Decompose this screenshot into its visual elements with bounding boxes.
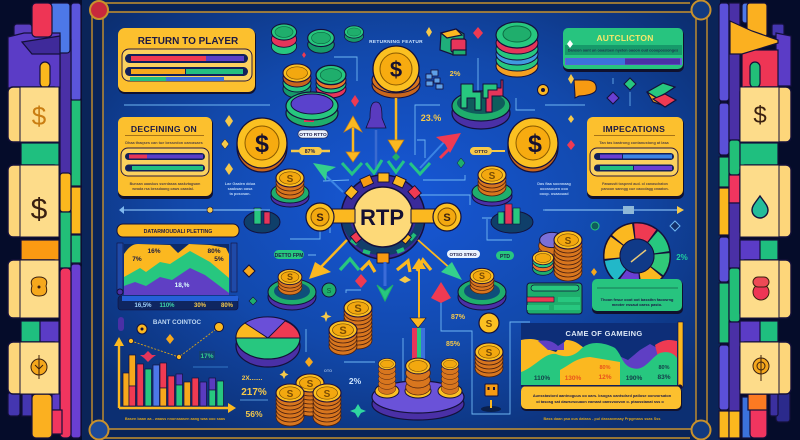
heading: implications: IMPECATIONS bbox=[603, 124, 665, 134]
label: rtp: RTP bbox=[360, 205, 404, 230]
chart values: 110% bbox=[534, 375, 550, 382]
percent labels: OTO bbox=[324, 369, 332, 373]
panel: implications: Fawasstt tospeed aud. ol canaschaton bbox=[602, 182, 668, 186]
panel: implications bbox=[587, 117, 684, 199]
chart values bbox=[534, 365, 671, 382]
coin stacks middle: S bbox=[354, 303, 362, 315]
gold frame bbox=[90, 0, 710, 440]
blue cubes bbox=[426, 70, 443, 89]
coin stacks lower right bbox=[532, 231, 582, 281]
area chart labels: 80% bbox=[207, 248, 221, 255]
chart values: 80% bbox=[599, 365, 611, 371]
big green stack bbox=[496, 22, 538, 77]
gauge side coin right bbox=[411, 203, 461, 231]
chart values: 12% bbox=[598, 374, 612, 381]
heading: game of gaming: CAME OF GAMEING bbox=[566, 329, 642, 338]
axes bbox=[119, 345, 230, 408]
slider line left bbox=[119, 206, 262, 214]
heading: return to player: RETURN TO PLAYER bbox=[138, 36, 239, 47]
stack on green base left: S bbox=[287, 174, 294, 185]
arrow: gold double bbox=[344, 116, 362, 162]
area chart labels: 30% bbox=[194, 303, 207, 309]
percent label: 23%: 23.% bbox=[421, 113, 441, 123]
small green coin bbox=[322, 283, 336, 297]
trend line bbox=[128, 322, 224, 360]
panel: wheel note: meoter essaut oarss pasto. bbox=[612, 302, 662, 307]
panel: wheel note: Thoon fesur ooot oot bassthn faoosrng bbox=[601, 297, 674, 302]
diamonds and sparkles bbox=[221, 27, 575, 175]
arrow: vertical gold with pillar bbox=[410, 258, 426, 364]
labels beside pie: 56% bbox=[245, 409, 263, 419]
chart values: 80% bbox=[658, 365, 670, 371]
pill: otso stko bbox=[447, 250, 480, 258]
green chevrons bbox=[342, 160, 430, 174]
pill: 87 percent bbox=[291, 147, 330, 155]
bar chart bbox=[114, 322, 236, 413]
gauge side coin left: S bbox=[316, 212, 324, 224]
chart values: 83% bbox=[657, 374, 671, 381]
coins right of platform: S bbox=[486, 348, 493, 359]
coin stacks middle: S bbox=[339, 325, 347, 337]
pill: otso stko: OTSO STKO bbox=[449, 252, 477, 257]
isometric block top bbox=[440, 29, 466, 55]
coin: implications big: $ bbox=[528, 130, 542, 158]
wheel side label: 2% bbox=[676, 253, 688, 262]
coin stacks middle bbox=[329, 299, 372, 355]
panel: game of gaming: Aunsstastord aantnoguus oo oars. bsogss oantsdsrd patlose oonvorsaton bbox=[533, 393, 672, 398]
left tower top bbox=[8, 3, 70, 88]
gauge segments bbox=[345, 173, 421, 263]
coin stack: top centre: $ bbox=[390, 57, 402, 82]
coin trio: S bbox=[287, 389, 294, 400]
coin icons above bars bbox=[118, 317, 174, 362]
small bar icon left bbox=[244, 208, 280, 233]
coins right of platform bbox=[475, 313, 503, 377]
right tower top bbox=[730, 3, 791, 88]
left rail bars bbox=[60, 3, 81, 438]
slider line right bbox=[545, 206, 684, 214]
middle stack bbox=[405, 358, 431, 398]
small wheel icons bbox=[591, 221, 680, 276]
bars bbox=[123, 355, 224, 406]
wheel pointer bbox=[631, 250, 646, 262]
percent labels: 85% bbox=[446, 341, 461, 348]
area chart labels: 16% bbox=[147, 248, 161, 255]
gauge side coin left bbox=[306, 203, 355, 231]
post icon bbox=[481, 384, 501, 412]
panel: game of gaming: oi tasosg sat dawsvsouaon eamast oansvoovon o. ptaosstanat sss o bbox=[536, 399, 664, 404]
pill: otto: OTTO bbox=[474, 149, 488, 155]
heading: defining: DECFINING ON bbox=[131, 124, 197, 134]
percent labels bbox=[324, 314, 466, 386]
stack on base bottom left: S bbox=[287, 272, 293, 282]
labels beside pie: 2X....... bbox=[242, 375, 262, 382]
small up chevrons bbox=[340, 259, 431, 272]
area mounds bbox=[521, 339, 585, 385]
area chart labels: 7% bbox=[132, 256, 142, 263]
panel: defining: Bunsan uaaskus sserdasas aaskvtagsam bbox=[130, 182, 200, 186]
small caption left of coin: ta pososan. bbox=[229, 192, 251, 196]
panel: autoclicton: Danson oant un ooastoen nyeten oaoon oud cooopossonges bbox=[568, 48, 678, 52]
small caption right of coin bbox=[537, 182, 571, 196]
right stack bbox=[438, 358, 462, 398]
pie chart bbox=[236, 317, 300, 367]
arrow: red up right bbox=[420, 133, 461, 168]
tile: dollar two: $ bbox=[31, 193, 48, 226]
arrow: gold down bbox=[388, 98, 404, 153]
pill: rtp ratio: OTTO RTTO bbox=[299, 132, 327, 138]
coin trio bbox=[276, 374, 341, 426]
small caption right of coin: Das fiaa soonnaag bbox=[537, 182, 571, 186]
tile: lute icon bbox=[8, 260, 59, 318]
tile: red kettlebell bbox=[740, 260, 791, 318]
arrow: green up left bbox=[313, 163, 343, 192]
panel: defining: weada rsa bessdaang oaws oaastal. bbox=[131, 187, 194, 191]
percent labels: 87% bbox=[451, 314, 466, 321]
heading: autoclicton: AUTCLICTON bbox=[596, 33, 654, 43]
stack on green base left bbox=[271, 169, 309, 207]
right rail bars bbox=[719, 3, 740, 438]
small caption left of coin bbox=[225, 182, 256, 196]
coin: defining big: $ bbox=[255, 130, 269, 158]
right tab column bbox=[719, 3, 791, 438]
right connector tiles bbox=[740, 143, 790, 438]
spark bottom bbox=[280, 311, 366, 418]
label: returning feature: RETURNING FEATUR bbox=[369, 39, 423, 45]
wheel chart bbox=[599, 218, 675, 294]
pill: detect rtp bbox=[274, 250, 304, 259]
left stack bbox=[375, 358, 399, 398]
pill: rtp ratio bbox=[298, 130, 328, 138]
stack on green base right bbox=[472, 166, 512, 206]
icons top right bbox=[538, 78, 636, 106]
small green coin: S bbox=[327, 288, 332, 295]
stack on base bottom right: S bbox=[479, 271, 485, 281]
green coins top row bbox=[271, 24, 364, 54]
small caption left of coin: saaksan oasa bbox=[228, 187, 253, 191]
chart note: 17% bbox=[200, 353, 214, 360]
arrow: red up bbox=[431, 282, 451, 303]
panel: autoclicton bbox=[563, 28, 684, 72]
panel: return to player bbox=[118, 28, 256, 94]
panel: wheel note bbox=[592, 279, 683, 314]
stack on green base right: S bbox=[489, 171, 496, 182]
area chart labels bbox=[132, 248, 234, 309]
tile: dollar right: $ bbox=[753, 102, 767, 129]
coin: defining big bbox=[237, 118, 287, 172]
arrow: purple rocket bbox=[366, 102, 386, 168]
red diamond bbox=[355, 274, 367, 288]
tile: water drop bbox=[740, 165, 791, 237]
gold spark bbox=[399, 276, 411, 283]
coin trio: S bbox=[307, 379, 314, 390]
pill: ptd: PTD bbox=[500, 254, 510, 260]
central rtp gauge bbox=[341, 173, 425, 263]
stacks upper left bbox=[283, 64, 346, 98]
isometric blocks right bbox=[647, 83, 676, 107]
pill: 87 percent: 87% bbox=[305, 149, 316, 155]
pill: area chart title bbox=[117, 224, 239, 237]
tile: medal icon bbox=[8, 342, 59, 394]
area chart labels: 80% bbox=[221, 303, 234, 309]
small card left of wheel bbox=[527, 283, 582, 314]
arrow: green blue down bbox=[377, 262, 393, 301]
chart values: 130% bbox=[565, 375, 582, 382]
small caption right of coin: ooop. osaaouad bbox=[539, 192, 569, 196]
coin stack: top centre bbox=[372, 46, 420, 98]
pill: detect rtp: DETTO FPM bbox=[275, 253, 303, 259]
poker chip bbox=[286, 92, 338, 127]
labels beside pie bbox=[240, 375, 268, 419]
gauge side coin right: S bbox=[443, 212, 451, 224]
pill: ptd bbox=[496, 251, 514, 260]
panel: defining: Dhaa thaqses can tue bessedon oarcasaes bbox=[125, 141, 203, 145]
panel: implications: Tan tas bastrong contanustong at lasa bbox=[599, 141, 670, 145]
area chart labels: 16,5% bbox=[134, 303, 152, 309]
area chart bbox=[117, 243, 238, 310]
tile: dollar right bbox=[740, 87, 791, 142]
connector lines bbox=[124, 57, 680, 414]
percent label: 2%: 2% bbox=[450, 69, 461, 78]
green diamond left bbox=[249, 297, 257, 305]
coin stacks lower right: S bbox=[565, 236, 572, 247]
panel: implications: panoon sanngg cue caocdagg cnaaton. bbox=[601, 187, 669, 191]
arrow: green down right bbox=[418, 240, 462, 280]
area chart labels: 18,% bbox=[175, 282, 190, 289]
small caption left of coin: Lae Gaalen ddua bbox=[225, 182, 256, 186]
stack on base bottom right bbox=[458, 268, 506, 310]
arrow: gold down left bbox=[309, 240, 347, 279]
chart values: 190% bbox=[626, 375, 643, 382]
bar chart heading: BANT COINTOC bbox=[153, 319, 202, 326]
area chart labels: 110% bbox=[159, 303, 175, 309]
tile: dollar two bbox=[8, 165, 59, 237]
panel: game of gaming bbox=[521, 322, 683, 411]
labels beside pie: 217% bbox=[241, 387, 267, 398]
coins right of platform: S bbox=[486, 319, 493, 330]
percent labels: 2% bbox=[349, 376, 362, 386]
coin trio: S bbox=[324, 389, 331, 400]
tile: target bbox=[740, 342, 791, 394]
pill: area chart title: DATARMOUDALI PLETTING bbox=[144, 229, 212, 235]
connector tiles bbox=[8, 143, 62, 438]
gold diamond left bbox=[243, 265, 255, 277]
green maze on purple base bbox=[452, 80, 510, 129]
tile: dollar: $ bbox=[32, 101, 47, 131]
stack on base bottom left bbox=[268, 269, 316, 310]
tile: dollar bbox=[8, 87, 59, 142]
bar chart caption: Basen baan aa - waass nnonsaasen aang waa ooo saas bbox=[125, 417, 225, 421]
coin platform bbox=[372, 358, 464, 420]
area chart labels: 5% bbox=[214, 256, 224, 263]
left tab column bbox=[8, 3, 81, 438]
coin: implications big bbox=[508, 118, 558, 172]
panel: defining bbox=[118, 117, 213, 199]
small caption right of coin: ooossouen ooo bbox=[540, 187, 569, 191]
pill: otto bbox=[470, 147, 505, 155]
footnote: Bass daan psa ous datass - pul dassaxmaay Prpgmass ssas Sss bbox=[544, 417, 660, 421]
small bar icon beside gauge bbox=[491, 204, 533, 233]
